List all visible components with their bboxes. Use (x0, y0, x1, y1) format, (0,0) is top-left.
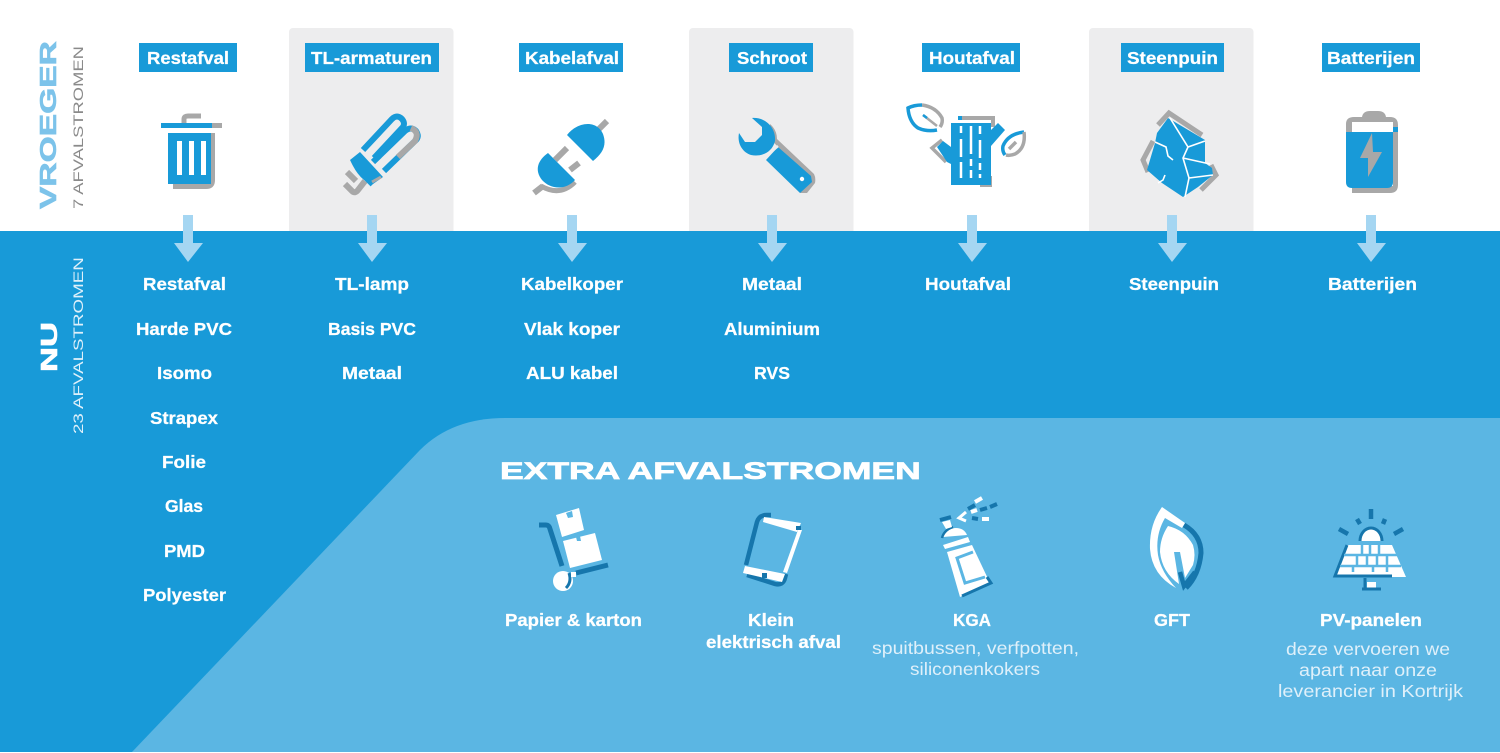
list: Kabel column: ALU kabel (526, 363, 618, 383)
list: Restafval column (136, 274, 232, 605)
label: TL-armaturen (305, 43, 439, 72)
label: Kabelafval (519, 43, 623, 72)
list: Restafval column: Isomo (157, 363, 212, 383)
icon: solar panel (1334, 509, 1406, 589)
arrow 3 (558, 215, 587, 262)
subheading: 23 afvalstromen: 23 AFVALSTROMEN (71, 257, 86, 434)
label: Batterijen: Batterijen (1327, 48, 1415, 68)
label: Houtafval: Houtafval (929, 48, 1015, 68)
list: Kabel column: Vlak koper (524, 319, 620, 339)
icon: spray can (940, 498, 997, 597)
arrow 6 (1158, 215, 1187, 262)
arrow 2 (358, 215, 387, 262)
label: Restafval: Restafval (147, 48, 229, 68)
icon: hand truck with boxes (539, 508, 608, 591)
list: Kabel column: Kabelkoper (521, 274, 623, 294)
label: Restafval (139, 43, 237, 72)
arrow 5 (958, 215, 987, 262)
caption: klein elektrisch afval (706, 610, 841, 652)
panel: blue band nu (0, 231, 1500, 752)
list: Schroot column: Metaal (742, 274, 802, 294)
list: TL column: TL-lamp (335, 274, 409, 294)
label: Schroot: Schroot (737, 48, 807, 68)
list: Schroot column (724, 274, 820, 383)
list: Restafval column: Harde PVC (136, 319, 232, 339)
icon: trash bin (161, 116, 222, 189)
label: Batterijen (1322, 43, 1420, 72)
arrow 4 (758, 215, 787, 262)
icon: wrench (739, 118, 815, 193)
list: TL column: Basis PVC (328, 319, 416, 339)
label: Houtafval (922, 43, 1020, 72)
icon: battery (1346, 111, 1398, 193)
caption: PV-panelen: leverancier in Kortrijk (1278, 681, 1463, 701)
list: Schroot column: Aluminium (724, 319, 820, 339)
caption: PV-panelen (1278, 610, 1463, 701)
list: Schroot column: RVS (754, 363, 790, 383)
label: Steenpuin (1121, 43, 1224, 72)
heading: nu: NU (37, 322, 62, 372)
caption: klein elektrisch afval: Klein (748, 610, 794, 630)
heading: extra afvalstromen: EXTRA AFVALSTROMEN (500, 458, 921, 485)
caption: KGA (872, 610, 1079, 679)
caption: klein elektrisch afval: elektrisch afval (706, 632, 841, 652)
list: Restafval column: PMD (164, 541, 205, 561)
caption: KGA: KGA (953, 610, 991, 630)
panel: grey column Schroot (689, 28, 854, 243)
panel: extra afvalstromen background (132, 418, 1500, 752)
caption: PV-panelen: PV-panelen (1320, 610, 1422, 630)
caption: PV-panelen: deze vervoeren we (1286, 639, 1450, 659)
list: Batterijen: Batterijen (1328, 274, 1417, 294)
panel: grey column TL-armaturen (289, 28, 454, 243)
caption: KGA: siliconenkokers (910, 659, 1040, 679)
caption: GFT: GFT (1154, 610, 1190, 630)
label: Kabelafval: Kabelafval (525, 48, 619, 68)
label: Steenpuin: Steenpuin (1127, 48, 1218, 68)
label: Schroot (729, 43, 813, 72)
label: TL-armaturen: TL-armaturen (311, 48, 432, 68)
icon: wood log with leaves (908, 105, 1024, 185)
caption: KGA: spuitbussen, verfpotten, (872, 638, 1079, 658)
list: Restafval column: Strapex (150, 408, 218, 428)
icon: fluorescent lamp (345, 116, 418, 192)
list: Restafval column: Restafval (143, 274, 226, 294)
list: Houtafval: Houtafval (925, 274, 1011, 294)
list: Kabel column (521, 274, 623, 383)
arrow 1 (174, 215, 203, 262)
icon: smartphone (743, 515, 802, 584)
caption: PV-panelen: apart naar onze (1299, 660, 1437, 680)
icon: leaf (1150, 507, 1201, 588)
list: Restafval column: Glas (165, 496, 203, 516)
list: Steenpuin: Steenpuin (1129, 274, 1219, 294)
list: Restafval column: Polyester (143, 585, 226, 605)
arrow 7 (1357, 215, 1386, 262)
panel: grey column Steenpuin (1089, 28, 1254, 243)
caption: papier en karton: Papier & karton (505, 610, 642, 630)
list: Restafval column: Folie (162, 452, 206, 472)
subheading: 7 afvalstromen: 7 AFVALSTROMEN (71, 46, 86, 209)
icon: plug (534, 121, 607, 193)
list: TL column: Metaal (342, 363, 402, 383)
icon: rock (1143, 113, 1216, 197)
list: TL column (328, 274, 416, 383)
heading: vroeger: VROEGER (36, 41, 62, 209)
